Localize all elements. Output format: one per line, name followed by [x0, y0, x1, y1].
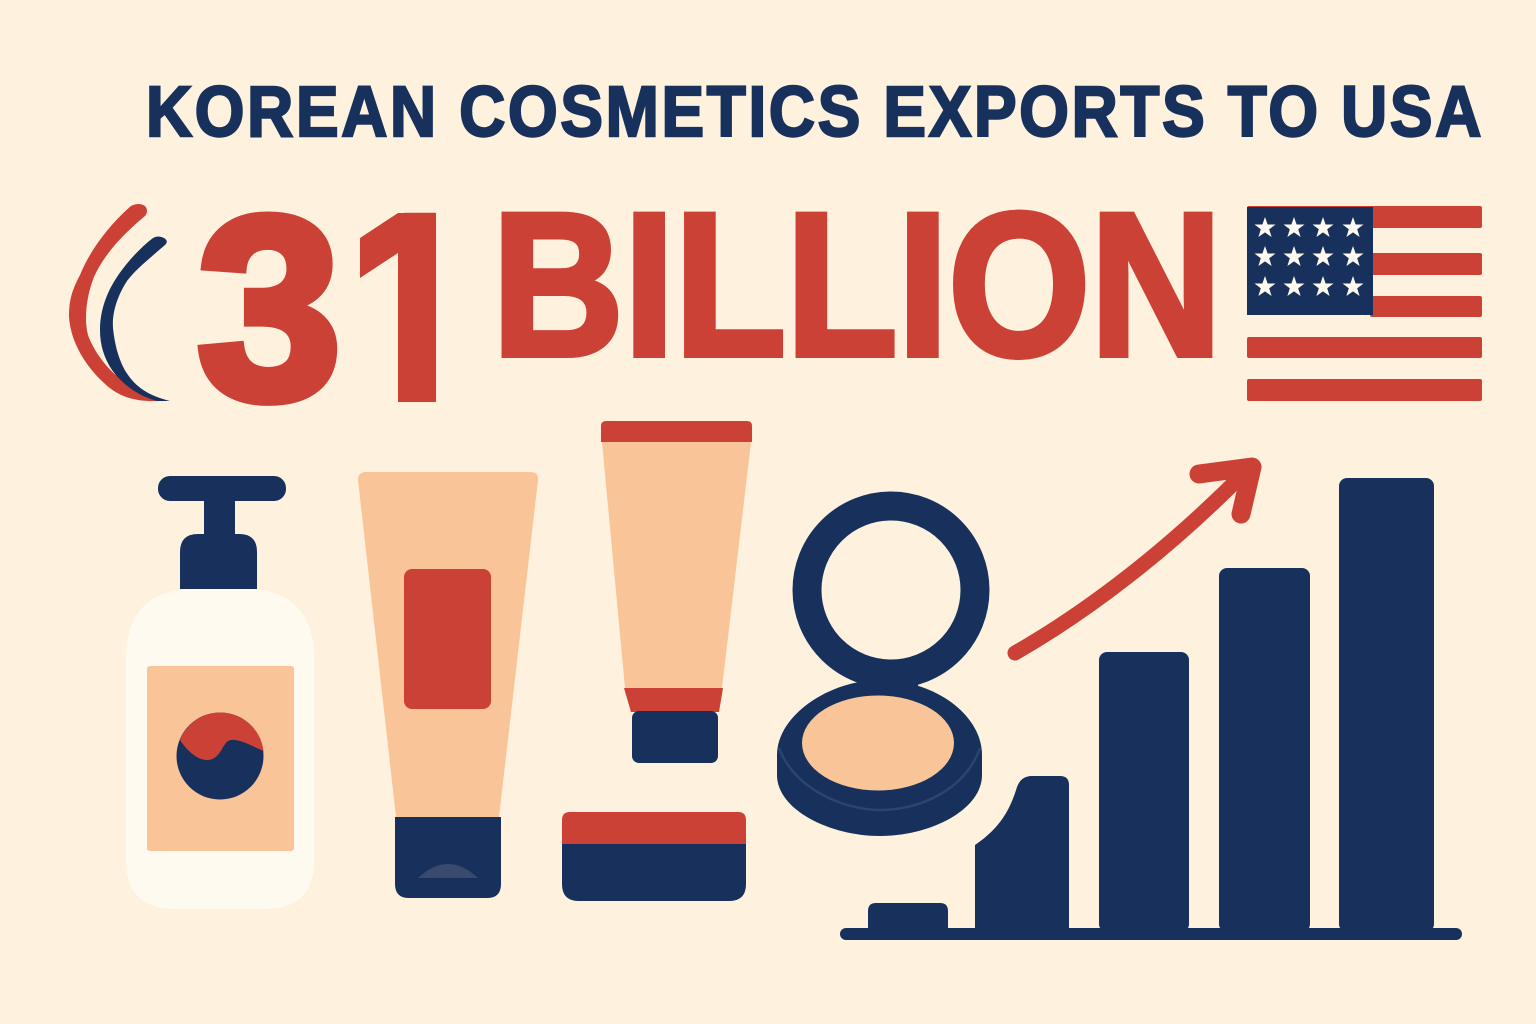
headline number: 31: 3	[197, 164, 342, 454]
icon: US flag	[1247, 206, 1482, 401]
icon: large tube	[358, 472, 538, 898]
icon: crescent swooshes	[69, 204, 170, 401]
icon: cream jar	[562, 812, 746, 901]
icon: pump bottle	[126, 476, 314, 909]
arrow: growth trend	[1015, 467, 1252, 653]
icon: small tube	[601, 421, 752, 763]
headline word: BILLION: BILLION	[492, 171, 1222, 399]
headline number: 31	[197, 212, 436, 406]
icon: compact mirror	[777, 506, 982, 836]
chart: rising bar chart	[840, 478, 1462, 940]
icon: taegeuk emblem	[176, 712, 264, 800]
headline number: 31: 1	[347, 154, 480, 461]
